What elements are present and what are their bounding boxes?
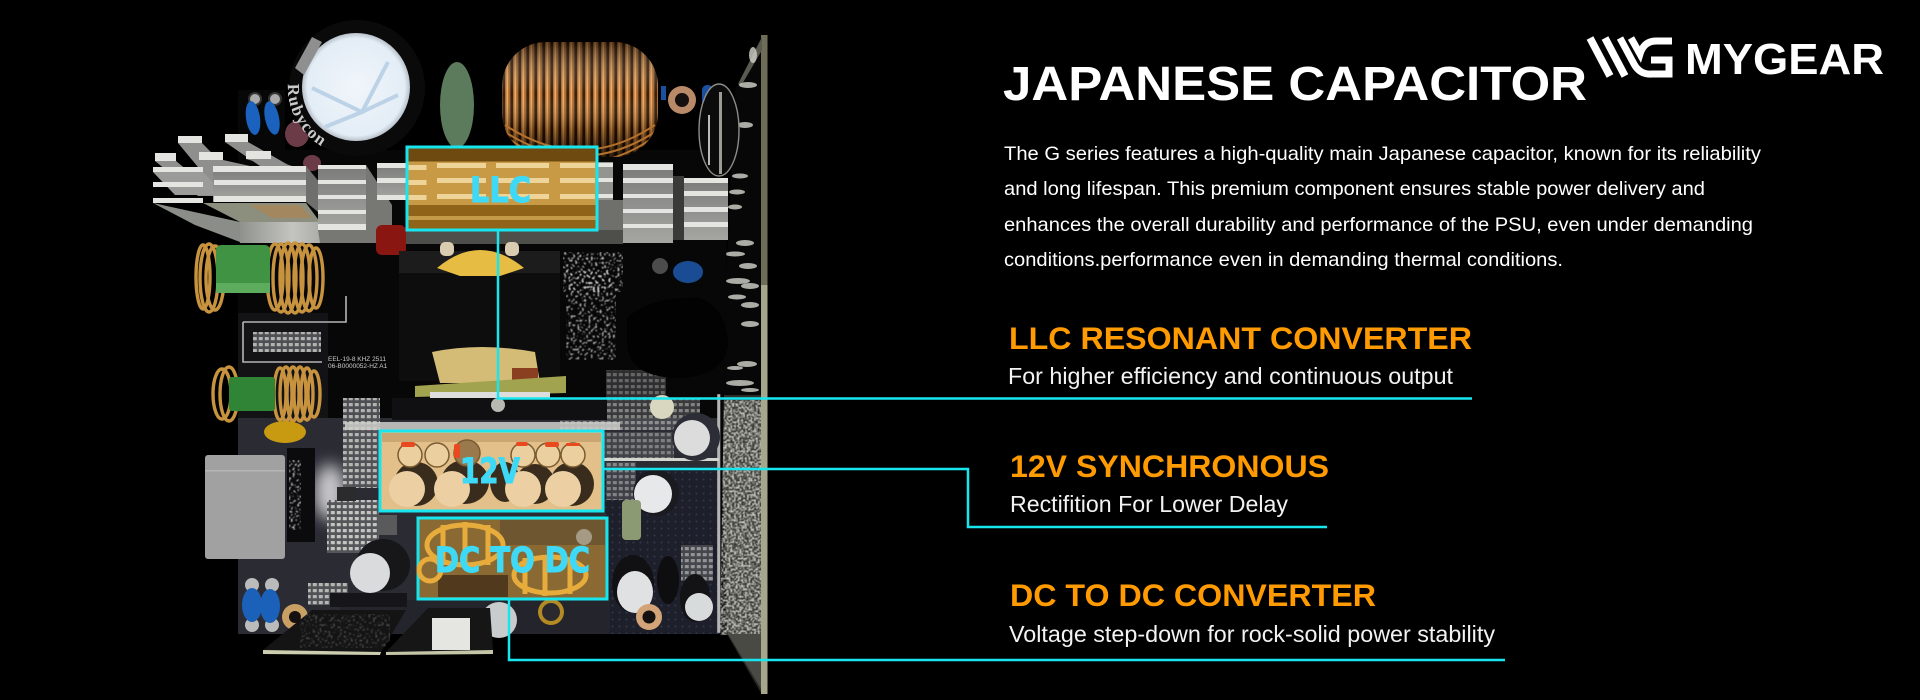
transistor row <box>345 398 620 430</box>
grey disc component <box>652 258 668 274</box>
gold inductor coils <box>419 522 586 596</box>
side panel <box>720 35 768 694</box>
LLC fin edges <box>408 163 595 200</box>
small IC chips <box>337 487 397 535</box>
connector line: DC to DC <box>509 599 1505 660</box>
feature: 12V synchronous: 12V SYNCHRONOUS <box>1010 448 1329 484</box>
feature: DC to DC converter: DC TO DC CONVERTER <box>1010 577 1376 613</box>
description paragraph <box>1004 143 1761 271</box>
dark capacitor bodies <box>394 460 594 506</box>
description paragraph: The G series features a high-quality main Japanese capacitor, known for its reliability <box>1004 143 1761 165</box>
heat sink fin plates <box>153 142 330 222</box>
upper right components <box>661 84 739 176</box>
DC to DC highlight box <box>418 518 607 599</box>
olive inductor <box>622 500 641 540</box>
logo icon <box>1590 38 1672 76</box>
description paragraph: and long lifespan. This premium component ensures stable power delivery and <box>1004 178 1705 200</box>
mounting washers <box>282 599 662 630</box>
heat sink base <box>153 203 240 242</box>
feature: LLC resonant converter: For higher efficiency and continuous output <box>1008 363 1454 389</box>
part number label: EEL-19-8 KHZ 2511 <box>328 356 386 363</box>
part number label <box>328 356 388 370</box>
heat sink bright fin edges <box>153 134 407 230</box>
part number label: 06-B0000052-HZ A1 <box>328 363 388 370</box>
circuit board outline traces <box>243 296 720 632</box>
upper left blue capacitors <box>244 93 321 171</box>
copper toroid inductor <box>502 42 658 163</box>
LLC label: LLC <box>470 171 531 211</box>
green varistor disc <box>440 62 474 148</box>
feature: LLC resonant converter: LLC RESONANT CONVERTER <box>1009 320 1472 356</box>
12V highlight box <box>380 431 603 511</box>
board glare <box>314 464 346 520</box>
description paragraph: conditions.performance even in demanding thermal conditions. <box>1004 249 1563 271</box>
main transformer <box>399 242 566 398</box>
electrolytic capacitors <box>350 395 720 638</box>
heat sink <box>153 134 728 244</box>
title: JAPANESE CAPACITOR <box>1003 58 1587 111</box>
large Rubycon capacitor <box>288 20 425 150</box>
yellow capacitor <box>264 421 306 443</box>
large capacitors row <box>389 471 581 507</box>
logo <box>1590 35 1884 84</box>
right heat sink <box>597 162 613 232</box>
PCB rail <box>603 458 719 461</box>
solder and trace texture <box>253 252 713 607</box>
feature: LLC resonant converter <box>1008 320 1472 389</box>
logo wordmark: MYGEAR <box>1685 35 1884 84</box>
upper left green choke <box>196 243 323 313</box>
feature: DC to DC converter: Voltage step-down for rock-solid power stability <box>1009 621 1495 647</box>
connector line: 12V <box>603 469 1327 527</box>
small capacitors row <box>398 440 585 467</box>
description paragraph: enhances the overall durability and performance of the PSU, even under demanding <box>1004 214 1753 236</box>
circuit board base <box>238 90 728 634</box>
12V label: 12V <box>460 452 520 492</box>
feature: 12V synchronous <box>1010 448 1329 517</box>
power supply board photo illustration <box>153 20 768 694</box>
side panel solder joints <box>725 47 759 392</box>
lower left blue capacitors <box>242 578 280 632</box>
LLC highlight box <box>407 147 597 230</box>
capacitor brand text: Rubycon <box>288 84 324 146</box>
red capacitor <box>376 225 406 255</box>
small blue capacitor <box>673 261 703 283</box>
connector line: LLC <box>498 230 1472 398</box>
capacitor orange marks <box>401 442 580 458</box>
DC TO DC label: DC TO DC <box>435 541 590 581</box>
lower left green choke <box>213 367 320 421</box>
output connector cards <box>263 608 493 655</box>
dark bobbin component <box>627 298 728 378</box>
feature: 12V synchronous: Rectifition For Lower Delay <box>1010 491 1288 517</box>
grey input block <box>205 448 315 559</box>
feature: DC to DC converter <box>1009 577 1495 647</box>
